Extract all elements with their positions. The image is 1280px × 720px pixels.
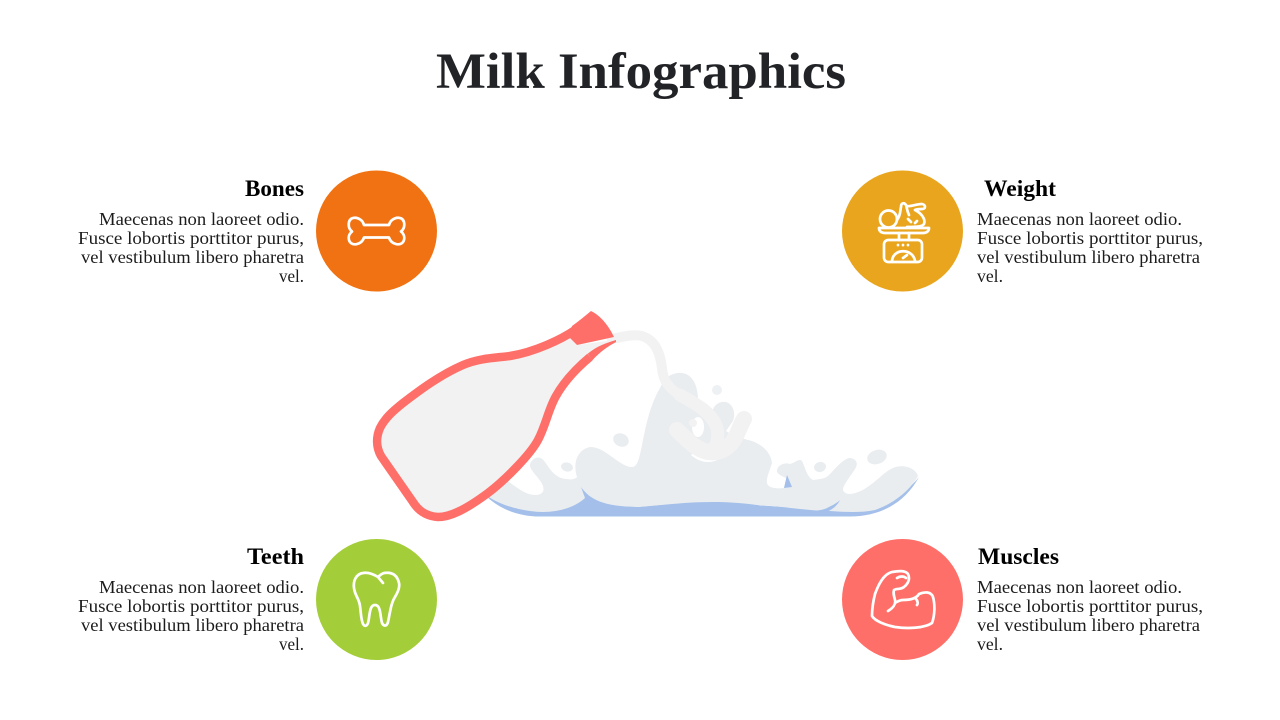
text block: muscles: vel vestibulum libero pharetra — [977, 615, 1200, 635]
panel: bones — [78, 170, 437, 292]
text block: muscles: vel. — [977, 634, 1003, 654]
bottle milk fill — [377, 330, 615, 517]
milk splash shadow — [485, 477, 919, 516]
text block: bones — [78, 209, 304, 286]
text block: teeth — [78, 577, 304, 654]
icon: tooth in green circle — [316, 539, 437, 660]
bottle outline taper at neck — [588, 340, 616, 360]
text block: bones: Maecenas non laoreet odio. — [99, 209, 304, 229]
icon: flexed arm in coral circle — [842, 539, 963, 660]
panel: muscles — [842, 539, 1203, 660]
text block: weight: Maecenas non laoreet odio. — [977, 209, 1182, 229]
text block: muscles — [977, 577, 1203, 654]
title: Milk Infographics — [436, 44, 846, 100]
milk stream — [612, 335, 744, 452]
text block: teeth: Maecenas non laoreet odio. — [99, 577, 304, 597]
icon: food on scale in amber circle — [842, 170, 963, 292]
panel: weight — [842, 170, 1203, 292]
milk splash — [486, 373, 918, 512]
heading: muscles: Muscles — [978, 544, 1059, 569]
icon: bone in orange circle — [316, 170, 437, 292]
bottle outline — [377, 330, 590, 517]
blue highlight triangle — [784, 475, 792, 488]
text block: teeth: vel vestibulum libero pharetra — [81, 615, 304, 635]
text block: bones: Fusce lobortis porttitor purus, — [78, 228, 304, 248]
illustration: milk bottle pouring into splash — [377, 311, 919, 517]
text block: bones: vel. — [279, 266, 304, 286]
heading: weight: Weight — [984, 176, 1056, 201]
text block: muscles: Fusce lobortis porttitor purus, — [977, 596, 1203, 616]
splash droplets — [560, 385, 889, 473]
text block: weight: Fusce lobortis porttitor purus, — [977, 228, 1203, 248]
text block: teeth: Fusce lobortis porttitor purus, — [78, 596, 304, 616]
text block: weight — [977, 209, 1203, 286]
text block: weight: vel vestibulum libero pharetra — [977, 247, 1200, 267]
text block: teeth: vel. — [279, 634, 304, 654]
bottle cap — [569, 311, 614, 345]
panel: teeth — [78, 539, 437, 660]
heading: teeth: Teeth — [247, 544, 304, 569]
text block: muscles: Maecenas non laoreet odio. — [977, 577, 1182, 597]
heading: bones: Bones — [245, 176, 304, 201]
text block: weight: vel. — [977, 266, 1003, 286]
text block: bones: vel vestibulum libero pharetra — [81, 247, 304, 267]
white gaps in splash — [691, 417, 722, 462]
milk blue lower band — [581, 487, 840, 516]
